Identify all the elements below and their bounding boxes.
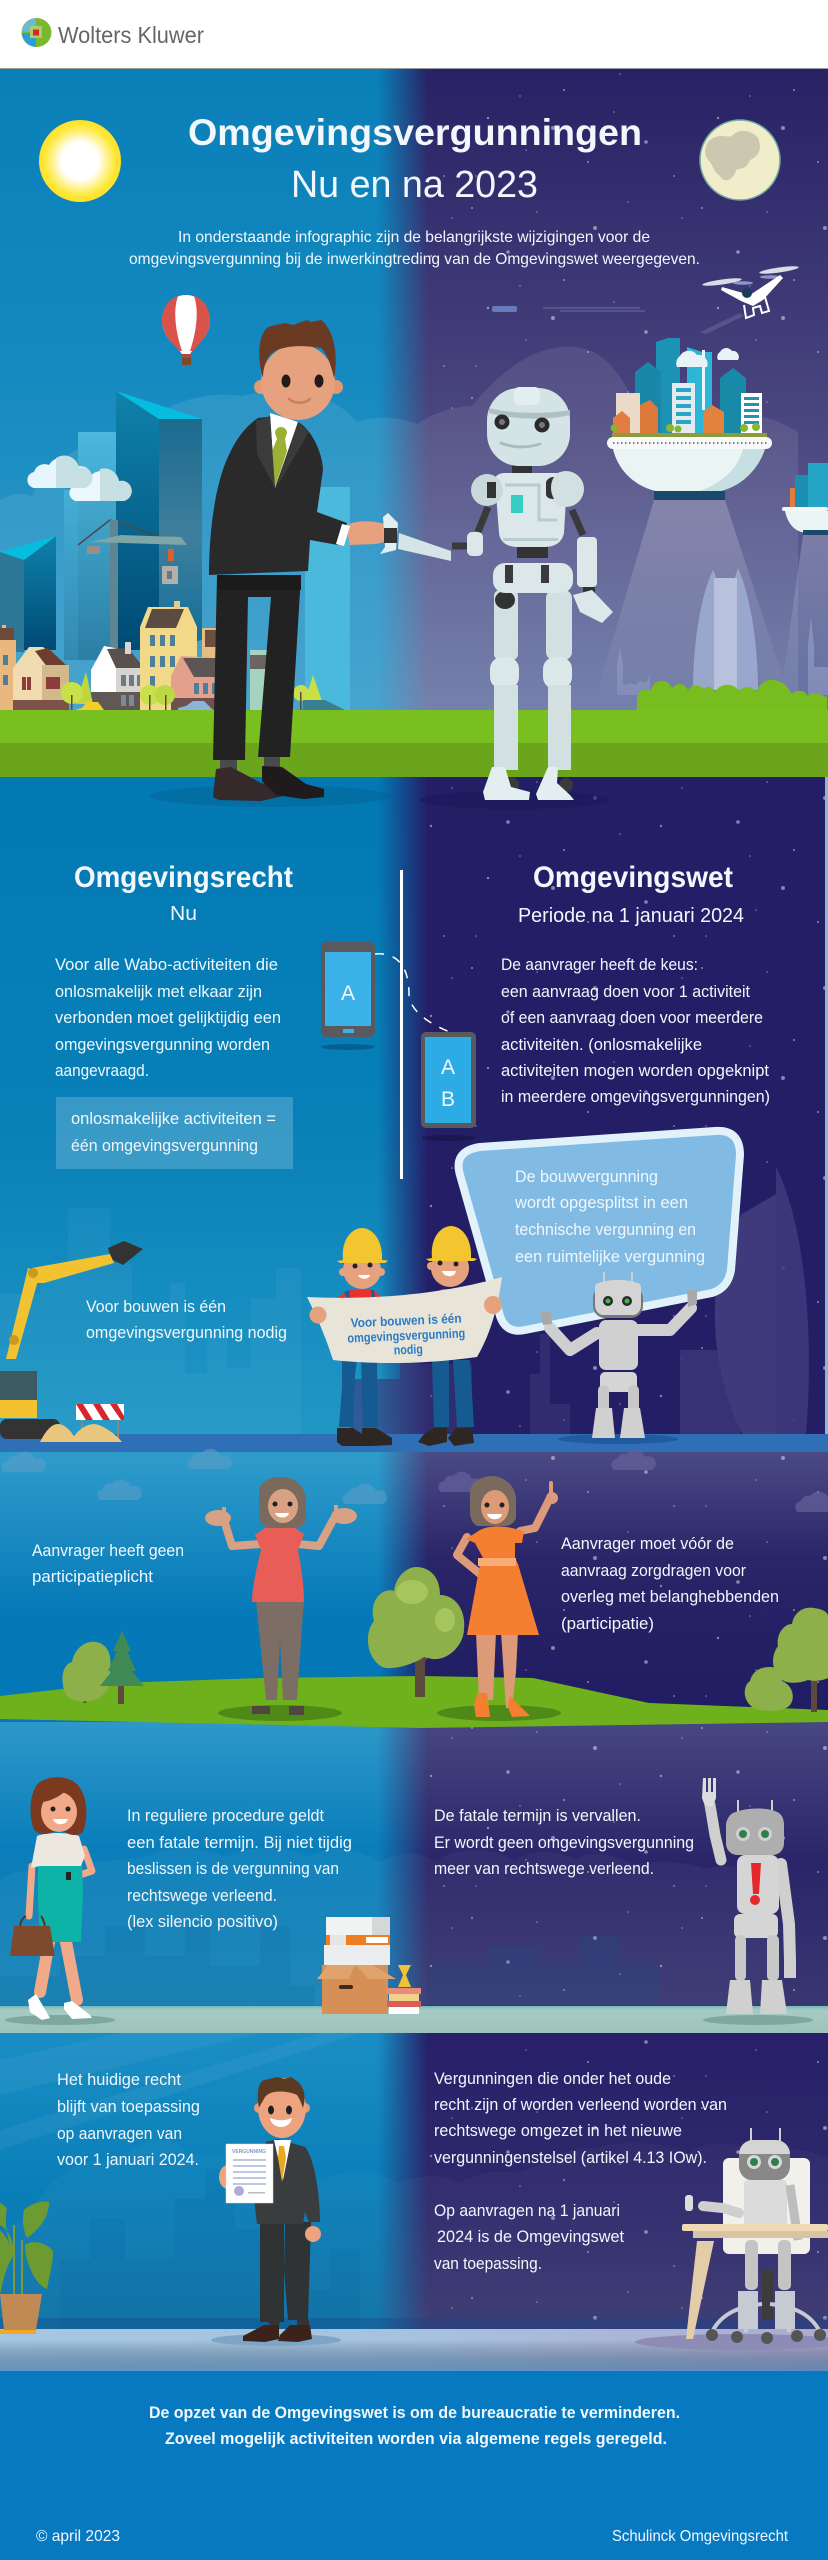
icon: robot with exclamation mark [702,1778,813,2025]
text block: keuze aanvrager: activiteiten. (onlosmakelijke [501,1035,702,1054]
panel: participatie [0,1449,828,1728]
floating city 1 [607,338,772,500]
panel: bouwvergunning sign: technische vergunning en [515,1220,696,1239]
icon: tree centre [368,1567,464,1697]
icon: trees left [62,1631,144,1704]
icon: robot shaking hands [380,387,613,809]
text block: Wabo-activiteiten: verbonden moet gelijktijdig een [55,1008,281,1027]
panel: overgangsrecht [0,2077,828,2371]
text block: aanvragen na 2024 [434,2201,624,2273]
text block: Wabo-activiteiten [55,955,281,1080]
socks [220,757,280,770]
heading: Omgevingsrecht: Omgevingsrecht [74,861,293,894]
text block: Wabo-activiteiten: Voor alle Wabo-activiteiten die [55,955,278,974]
icon: phone B: B [441,1088,455,1111]
subtitle: Nu en na 2023 [291,164,538,206]
plan text: omgevingsvergunning [347,1325,466,1346]
faint city left [0,1208,301,1438]
skyscraper [693,568,758,690]
night clouds [438,1450,828,1512]
text block: voor bouwen [86,1297,287,1342]
faint city [60,2169,360,2329]
text block: huidige recht: voor 1 januari 2024. [57,2150,199,2169]
trousers [213,575,301,760]
heading: Omgevingswet [518,861,744,927]
text block: intro: In onderstaande infographic zijn de belangrijkste wijzigingen voor de [178,229,650,246]
icon: clouds [27,456,132,501]
copyright: © april 2023 [36,2528,120,2545]
text block: huidige recht: blijft van toepassing [57,2097,200,2116]
faint clouds [0,1848,770,2005]
footer panel [0,2371,828,2560]
text block: oude vergunningen: Vergunningen die onder het oude [434,2069,671,2088]
panel: section 2 scenery [0,870,828,1452]
text block: intro [129,229,700,268]
legs and chair [745,2240,758,2290]
head [254,380,268,394]
text block: fatale termijn nu: (lex silencio positivo) [127,1912,278,1931]
text block: participatie verplicht [561,1534,779,1633]
text block: participatie verplicht: Aanvrager moet vóór de [561,1534,734,1553]
icon: plant [0,2201,53,2334]
text block: oude vergunningen: vergunningenstelsel (artikel 4.13 IOw). [434,2148,707,2167]
text block: aanvragen na 2024: 2024 is de Omgevingswet [437,2227,624,2246]
text block: Wabo-activiteiten: omgevingsvergunning worden [55,1035,270,1054]
panel: bouwvergunning sign: De bouwvergunning [515,1167,658,1186]
dashed arrow between phones [375,954,450,1032]
robot arms [452,507,583,546]
panel: fatale termijn [0,1777,828,2033]
footer statement: Zoveel mogelijk activiteiten worden via algemene regels geregeld. [165,2429,667,2448]
heading: Omgevingsrecht: Nu [170,903,197,925]
text block: fatale termijn nu: rechtswege verleend. [127,1886,277,1905]
panel: future city [492,265,828,710]
houses [0,601,267,710]
text block: voor bouwen: omgevingsvergunning nodig [86,1323,287,1342]
text block: Wabo-activiteiten: onlosmakelijk met elkaar zijn [55,982,262,1001]
text block: fatale termijn nu: een fatale termijn. Bij niet tijdig [127,1833,352,1852]
legs [494,590,518,660]
text block: intro: omgevingsvergunning bij de inwerkingtreding van de Omgevingswet weergegeven. [129,251,700,268]
icon: moon [700,120,780,200]
torso [512,465,532,481]
bushes [637,680,827,710]
text block: fatale termijn nu: beslissen is de vergunning van [127,1859,339,1878]
heading: Omgevingswet: Periode na 1 januari 2024 [518,905,744,927]
floating city 2 [782,463,828,535]
callout: één omgevingsvergunning: één omgevingsvergunning [71,1136,258,1155]
text block: huidige recht: op aanvragen van [57,2124,182,2143]
icon: businessman [150,320,394,807]
icon: Wolters Kluwer globe logo [22,18,52,47]
title: Omgevingsvergunningen [188,112,642,153]
bottom darker strip of section 5 [0,2318,828,2329]
trees [61,672,345,710]
shoes [213,767,283,801]
text block: keuze aanvrager: activiteiten mogen worden opgeknipt [501,1061,769,1080]
grass island [0,1676,828,1728]
text block: keuze aanvrager [501,955,770,1106]
text block: keuze aanvrager: of een aanvraag doen voor meerdere [501,1008,763,1027]
icon: construction workers with plan [307,1226,502,1446]
icon: phone B [421,1032,476,1141]
desk [682,2224,828,2231]
dark city right [350,1334,570,1434]
text block: keuze aanvrager: De aanvrager heeft de keus: [501,955,698,974]
text block: oude vergunningen: rechtswege omgezet in het nieuwe [434,2121,682,2140]
callout: één omgevingsvergunning: onlosmakelijke activiteiten = [71,1109,276,1128]
text block: geen participatieplicht: Aanvrager heeft geen [32,1541,184,1560]
plan text [346,1310,466,1360]
icon: paper stack and box [317,1917,421,2014]
worker 2 [418,1226,477,1446]
text block: keuze aanvrager: een aanvraag doen voor 1 activiteit [501,982,750,1001]
text block: fatale termijn nu: In reguliere procedure geldt [127,1806,324,1825]
divider [400,870,403,1179]
text block: participatie verplicht: aanvraag zorgdragen voor [561,1561,746,1580]
shirt and tie [270,413,298,488]
panel: bouwvergunning sign: een ruimtelijke vergunning [515,1247,705,1266]
text block: oude vergunningen: recht zijn of worden verleend worden van [434,2095,727,2114]
shoulders [471,474,503,506]
icon: trees right [745,1608,828,1712]
text block: participatie verplicht: (participatie) [561,1614,654,1633]
shadows [218,1705,342,1721]
icon: woman orange dress [457,1476,558,1717]
big faint clouds [0,347,798,710]
text block: fatale termijn vervallen [434,1806,694,1878]
ground: hero grass [0,710,828,777]
floor [0,2006,828,2033]
icon: drone [700,265,799,334]
ground shadow [150,785,390,807]
text block: fatale termijn vervallen: Er wordt geen omgevingsvergunning [434,1833,694,1852]
icon: hot-air balloon [162,295,210,365]
faint city [0,1926,660,2006]
text block: voor bouwen: Voor bouwen is één [86,1297,226,1316]
heading: Omgevingsrecht [74,861,293,925]
city: towers and crane [0,391,350,720]
text block: geen participatieplicht [32,1541,184,1586]
icon: woman with bag [5,1777,115,2025]
callout: één omgevingsvergunning [56,1097,293,1169]
footer statement [149,2403,680,2448]
faint clouds [0,2140,828,2340]
panel: bouwvergunning sign [459,1131,740,1331]
text block: Wabo-activiteiten: aangevraagd. [55,1061,149,1080]
icon: phone B: A [441,1056,455,1079]
background: night side (right) [382,69,828,2329]
panel: bouwvergunning sign: wordt opgesplitst in een [514,1193,688,1212]
text block: aanvragen na 2024: van toepassing. [434,2254,542,2273]
plan text: nodig [394,1341,423,1358]
text block: keuze aanvrager: in meerdere omgevingsvergunningen) [501,1087,770,1106]
text block: aanvragen na 2024: Op aanvragen na 1 januari [434,2201,620,2220]
icon: phone A [321,942,375,1050]
heading: Omgevingswet: Omgevingswet [533,861,733,894]
icon: cars [75,701,216,720]
header bar [0,0,828,70]
text block: geen participatieplicht: participatieplicht [32,1567,153,1586]
text block: oude vergunningen [434,2069,727,2167]
text block: huidige recht [57,2070,200,2169]
icon: crane [78,520,187,660]
floor [0,1434,828,1452]
jacket [209,416,347,575]
text block: fatale termijn vervallen: De fatale termijn is vervallen. [434,1806,641,1825]
icon: sun [39,120,121,202]
icon: businessman with permit [211,2077,341,2346]
faint tower silhouettes [617,617,828,695]
small clouds [1,1449,387,1504]
publisher: Schulinck Omgevingsrecht [612,2528,789,2545]
text block: participatie verplicht: overleg met belanghebbenden [561,1587,779,1606]
title [188,112,642,206]
text block: fatale termijn vervallen: meer van rechtswege verleend. [434,1859,654,1878]
text block: fatale termijn nu [127,1806,352,1931]
icon: woman red shirt [205,1477,357,1715]
head [487,388,570,466]
icon: road barrier [76,1404,124,1440]
unrolled plan [307,1277,502,1363]
icon: robot holding sign [540,1272,697,1444]
icon: phone A: A [341,982,355,1005]
icon: businessman with permit: VERGUNNING [232,2149,266,2155]
pelvis [517,542,548,558]
worker 1 [336,1228,392,1446]
text block: huidige recht: Het huidige recht [57,2070,181,2089]
logo wordmark: Wolters Kluwer [58,22,204,48]
icon: small flying ship [492,306,645,312]
plan text: Voor bouwen is één [350,1311,462,1330]
panel: hero [0,120,798,720]
floor [0,2329,828,2371]
icon: sand piles [40,1424,122,1442]
icon: excavator [0,1241,143,1439]
icon: robot at desk [635,2128,828,2350]
light beams [595,500,790,700]
hand [346,521,394,545]
footer statement: De opzet van de Omgevingswet is om de bureaucratie te verminderen. [149,2403,680,2422]
